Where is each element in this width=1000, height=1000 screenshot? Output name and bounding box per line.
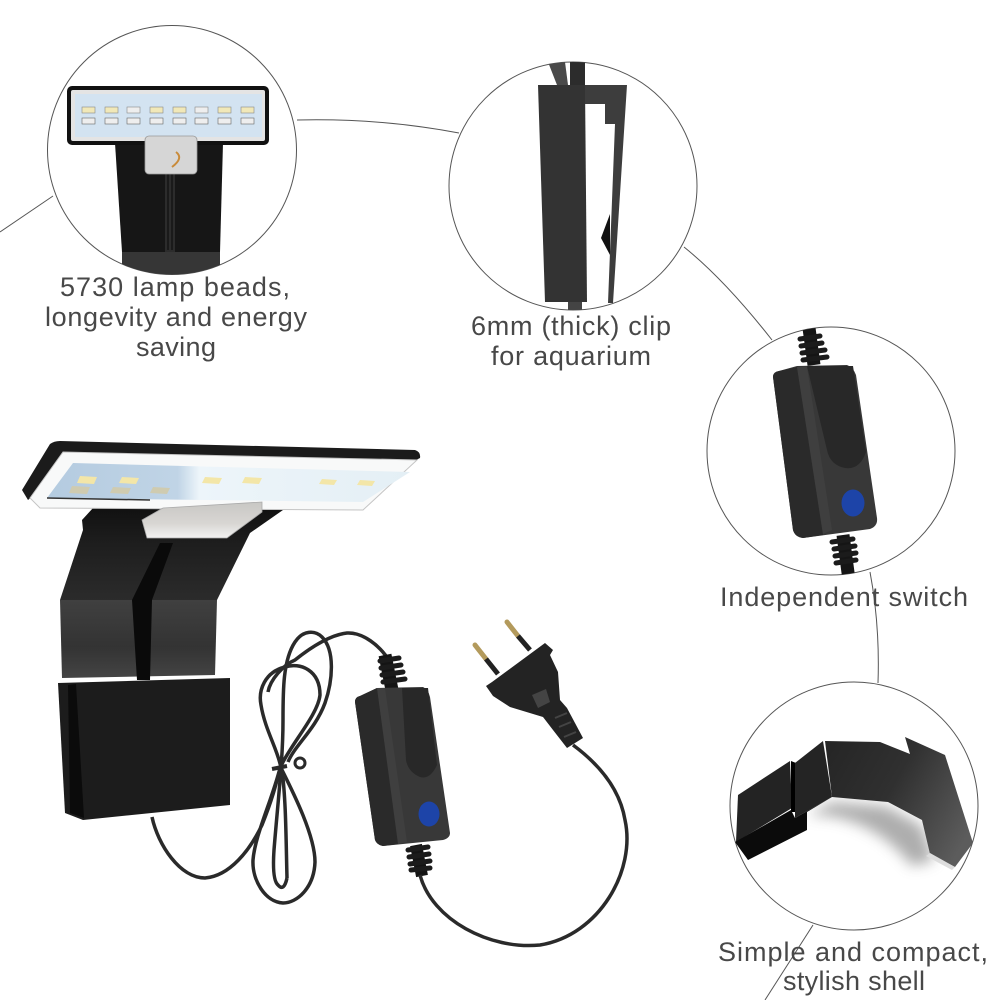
product: aquarium light	[22, 441, 627, 946]
label: lamp beads: saving	[136, 332, 216, 362]
LED board	[47, 463, 410, 502]
plug	[475, 622, 583, 748]
clip block	[58, 678, 230, 820]
panel: switch detail circle	[707, 327, 955, 580]
bracket lower	[60, 600, 217, 678]
power cable	[420, 745, 627, 946]
switch button	[842, 490, 864, 516]
lamp wire	[132, 543, 173, 680]
switch strain relief bottom	[408, 845, 430, 876]
label: lamp beads	[45, 272, 308, 362]
label: lamp beads: longevity and energy	[45, 302, 308, 332]
label: lamp beads: 5730 lamp beads,	[60, 272, 290, 302]
shell bracket	[735, 737, 973, 870]
clip side view	[538, 60, 627, 312]
clear cover	[30, 452, 417, 510]
wire cover	[142, 502, 262, 538]
label: clip	[471, 311, 671, 371]
switch strain relief top	[380, 655, 405, 690]
lamp head shell	[22, 441, 420, 500]
switch close-up	[773, 328, 877, 580]
panel: clip detail circle	[449, 60, 697, 312]
panel: shell detail circle	[730, 682, 978, 930]
label: shell: Simple and compact,	[718, 937, 988, 967]
label: clip: 6mm (thick) clip	[471, 311, 671, 341]
switch body	[355, 687, 450, 846]
label: shell: stylish shell	[783, 966, 925, 996]
switch button	[418, 802, 440, 826]
cable loops	[152, 632, 390, 903]
label: shell	[718, 937, 988, 996]
label: clip: for aquarium	[491, 341, 651, 371]
bracket upper	[60, 508, 283, 600]
lamp head front view	[67, 86, 269, 280]
panel: lamp beads detail circle	[48, 26, 296, 280]
label: switch: Independent switch	[720, 582, 968, 612]
connector lines	[0, 120, 878, 1000]
